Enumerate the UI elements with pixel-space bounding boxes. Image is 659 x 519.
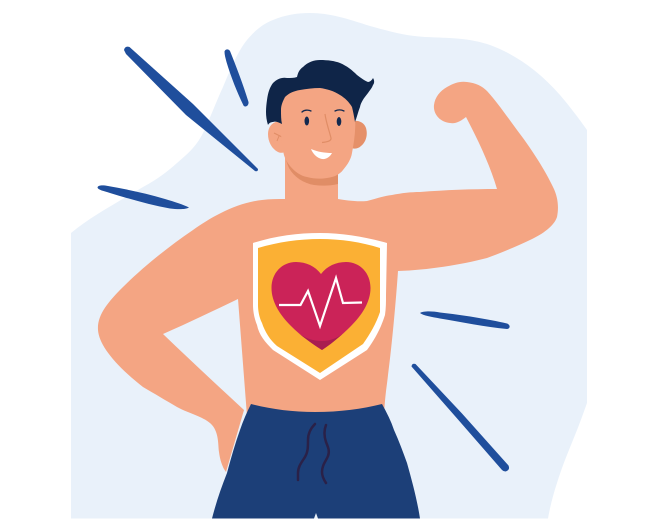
- heart: [272, 262, 370, 350]
- heart shadow: [298, 332, 345, 350]
- shield border: [253, 233, 387, 380]
- burst line: upper middle: [224, 49, 249, 107]
- shield fill: [258, 239, 380, 373]
- burst line: right upper: [420, 311, 510, 329]
- background blob: [71, 13, 587, 518]
- shield: [253, 233, 387, 380]
- pulse line: [279, 278, 362, 326]
- smile: [311, 149, 332, 159]
- shorts shape: [212, 404, 420, 518]
- left eye: [304, 116, 309, 126]
- nose: [322, 114, 331, 142]
- burst line: upper left long: [124, 47, 258, 171]
- right eyebrow: [335, 110, 344, 111]
- left eyebrow: [302, 110, 311, 112]
- shorts: [212, 404, 420, 518]
- ear detail: [274, 133, 284, 141]
- hair: [266, 60, 374, 125]
- burst lines: [98, 47, 510, 472]
- left ear: [268, 122, 288, 153]
- drawstrings: [298, 424, 329, 483]
- face: [280, 80, 355, 179]
- right ear: [350, 121, 367, 149]
- body torso and arms: [98, 82, 558, 472]
- man figure: [98, 60, 558, 518]
- burst line: right lower: [412, 364, 509, 472]
- neck shadow: [285, 155, 338, 186]
- right eye: [337, 117, 341, 126]
- burst line: left: [98, 185, 189, 209]
- head: [266, 60, 374, 186]
